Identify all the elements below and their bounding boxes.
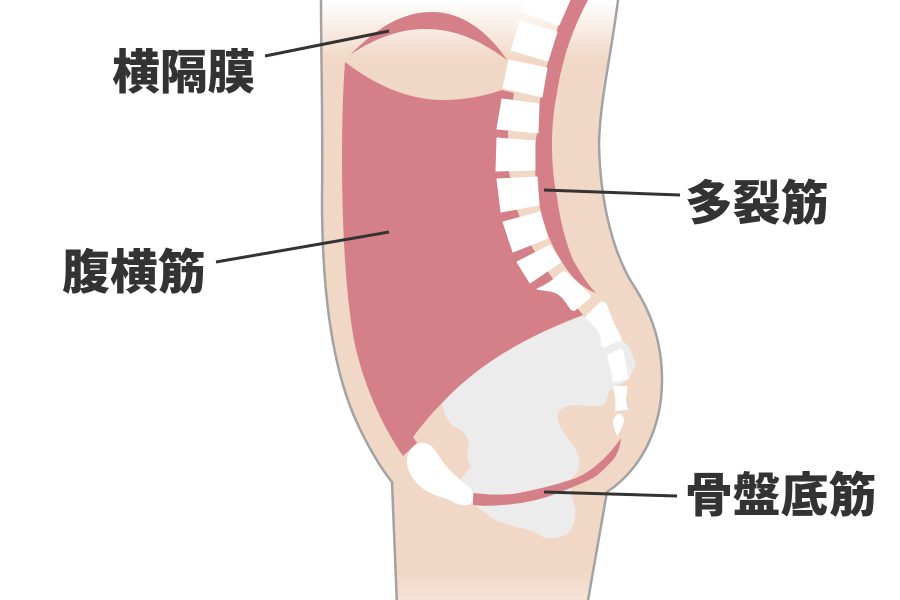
muscle: transversus abdominis xyxy=(342,62,583,456)
pubic bone xyxy=(407,443,473,505)
label: transversus abdominis: 腹横筋 xyxy=(62,247,205,300)
leader line: multifidus xyxy=(544,190,680,195)
pelvic organs xyxy=(442,316,636,538)
label: pelvic floor: 骨盤底筋 xyxy=(685,470,876,523)
muscle: pelvic floor xyxy=(473,438,621,506)
leader line: pelvic floor xyxy=(544,492,677,496)
label: multifidus: 多裂筋 xyxy=(685,178,828,231)
label: diaphragm: 横隔膜 xyxy=(112,47,255,100)
body silhouette xyxy=(321,0,662,600)
sacrum and coccyx xyxy=(585,301,628,436)
leader line: diaphragm xyxy=(265,31,389,56)
leader line: transversus abdominis xyxy=(216,232,389,262)
muscle: diaphragm xyxy=(350,12,507,60)
muscle: multifidus xyxy=(535,0,596,293)
spine vertebrae xyxy=(496,0,590,310)
